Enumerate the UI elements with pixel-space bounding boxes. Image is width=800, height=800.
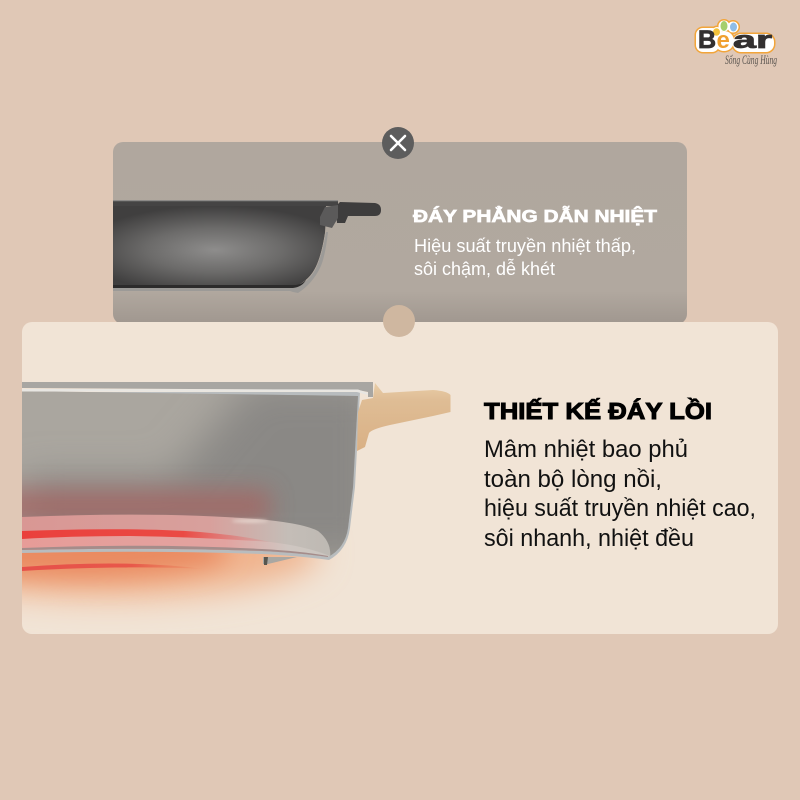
logo paw toes [713,21,737,36]
icon: close marker [382,127,414,159]
text: convex bottom description: Mâm nhiệt bao phủ [484,436,688,463]
logo wordmark: B [698,26,716,54]
text: convex bottom description: hiệu suất truyền nhiệt cao, [484,495,756,522]
text: flat bottom description [414,236,636,279]
text: convex bottom description [484,436,756,552]
text: flat bottom description: Hiệu suất truyền nhiệt thấp, [414,236,636,256]
icon: connector dot [383,305,415,337]
logo: Bear [696,20,777,67]
text: flat bottom description: sôi chậm, dễ khét [414,258,555,279]
heading: convex bottom: THIẾT KẾ ĐÁY LỒI [484,397,712,424]
image: grey pot with heat glow [0,380,450,598]
logo wordmark: e [716,27,730,54]
panel: convex bottom pot [0,322,778,634]
image: dark pot with flat base [113,200,381,293]
heading: flat bottom: ĐÁY PHẲNG DẪN NHIỆT [413,205,657,226]
panel background [22,322,778,634]
panel: flat bottom pot [113,142,687,324]
logo backing [696,20,774,52]
text: convex bottom description: toàn bộ lòng nồi, [484,466,662,493]
logo wordmark [698,26,772,54]
logo wordmark: ar [733,27,772,54]
panel background [113,142,687,324]
text: convex bottom description: sôi nhanh, nhiệt đều [484,525,694,552]
